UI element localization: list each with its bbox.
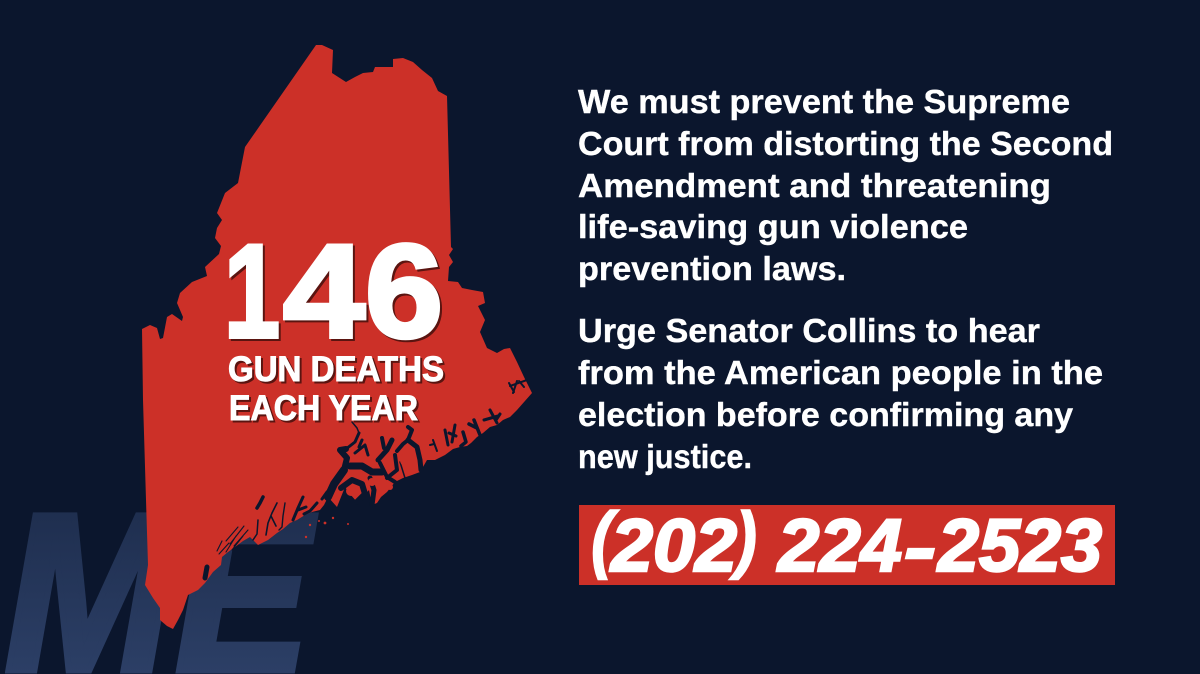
label: gun deaths each year [228,350,446,430]
big number 146: 1 [224,218,280,366]
big number 146: 4 [283,218,365,366]
phone number banner: 2523 [936,504,1102,587]
phone number banner [579,497,1115,589]
text block: Supreme Court message: Amendment and threatening [578,168,1051,205]
label: gun deaths each year: EACH YEAR [231,391,420,430]
phone number banner: 202 [609,504,737,587]
map: state of Maine silhouette [142,45,532,629]
text block: call to action: Urge Senator Collins to hear [578,313,1040,350]
big number 146: 6 [365,218,443,366]
phone number banner: ( [591,497,620,580]
big number 146 [224,218,445,368]
text block: Supreme Court message: Court from distorting the Second [578,126,1113,163]
text block: Supreme Court message: We must prevent the Supreme [578,84,1070,121]
text block: call to action: new justice. [578,439,752,476]
phone number banner: ) [729,497,757,580]
text block: call to action: from the American people in the [578,355,1103,392]
label: gun deaths each year: GUN DEATHS [230,352,446,391]
label: gun deaths each year: EACH YEAR [229,389,418,428]
big number 146: 6 [367,220,445,368]
big number 146: 1 [226,220,282,368]
phone number banner: - [904,506,936,589]
coastal islands [305,453,414,538]
text block: call to action [578,313,1103,476]
big number 146: 4 [285,220,367,368]
text block: Supreme Court message: prevention laws. [578,251,846,288]
label: gun deaths each year: GUN DEATHS [228,350,444,389]
text block: call to action: election before confirming any [578,397,1073,434]
text block: Supreme Court message: life-saving gun violence [578,209,968,246]
coastal inlets [205,380,527,578]
text block: Supreme Court message [578,84,1113,288]
phone number banner: 224 [776,504,902,587]
